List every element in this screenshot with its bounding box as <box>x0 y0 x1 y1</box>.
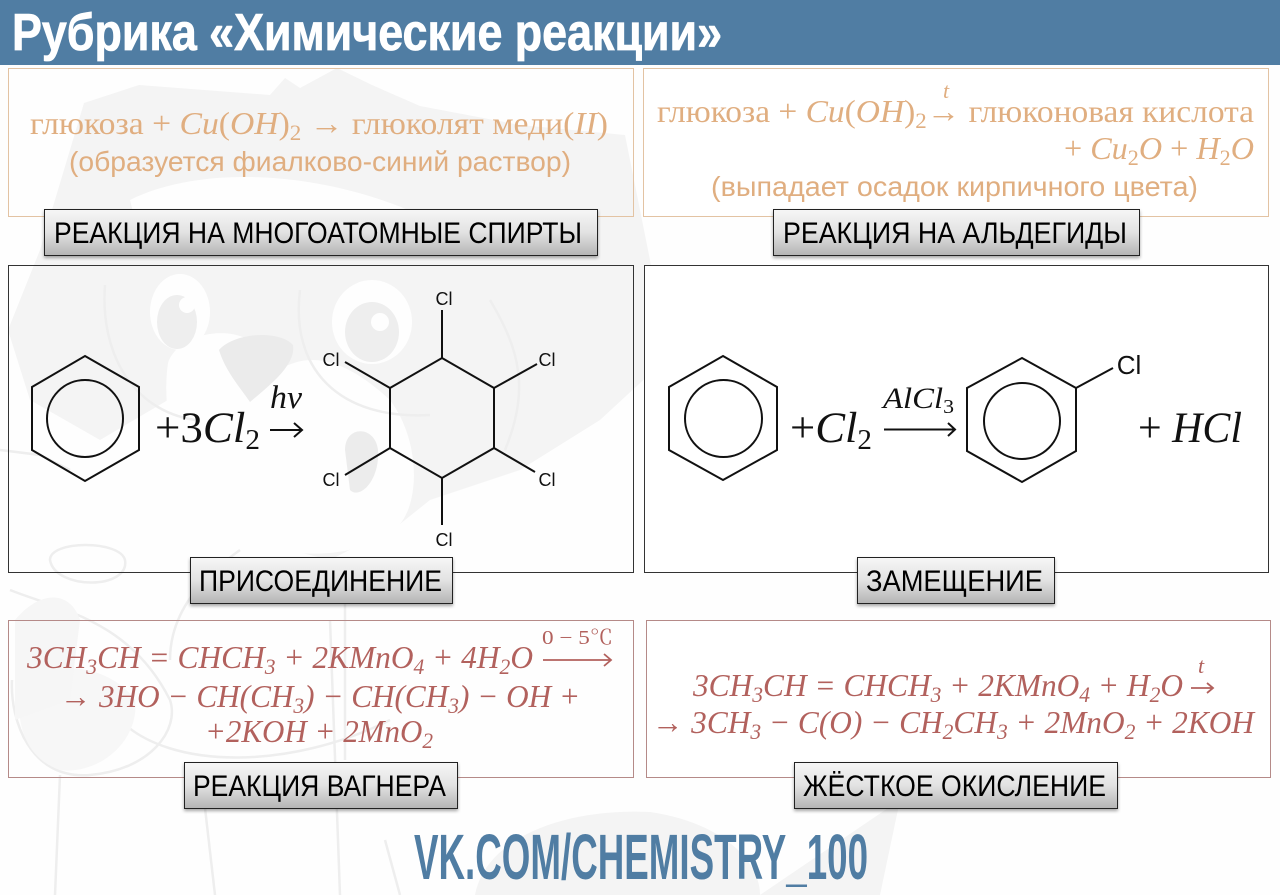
condition: t: t <box>1198 653 1205 678</box>
panel: reaction on polyhydric alcohols <box>8 68 634 216</box>
equation line 2: 2 <box>943 719 953 744</box>
chlorobenzene <box>967 350 1141 482</box>
label: addition: ПРИСОЕДИНЕНИЕ <box>199 565 442 598</box>
equation line 1: 2 <box>500 654 510 679</box>
equation line 2: → 3HO − CH(CH <box>60 678 299 714</box>
benzene ring <box>32 356 139 481</box>
equation line 1: 3 <box>930 682 941 707</box>
equation line 1: 3 <box>751 682 763 707</box>
equation line 1: 3CH <box>693 667 753 703</box>
equation line 2: → 3CH <box>652 704 752 740</box>
label: reaction on polyhydric alcohols: РЕАКЦИЯ НА МНОГОАТОМНЫЕ СПИРТЫ <box>54 217 582 250</box>
reagent: Cl2: 2 <box>857 425 872 456</box>
equation line 1: + H <box>1090 667 1151 703</box>
reagent: 3Cl2: +3Cl <box>155 405 244 452</box>
equation line 2: 2 <box>1125 719 1135 744</box>
equation: glucose oxidation: 2 <box>915 108 927 133</box>
equation line 1: O <box>1160 667 1183 703</box>
equation line 2: 3 <box>447 693 459 718</box>
equation line 1: CH = CHCH <box>763 667 932 703</box>
equation: glucose with copper hydroxide: 2 <box>290 120 301 145</box>
catalyst: AlCl3: 3 <box>943 396 954 418</box>
hexachlorocyclohexane: Cl <box>322 470 340 490</box>
footer link: VK.COM/CHEMISTRY_100 <box>414 821 868 893</box>
equation line 1: 3 <box>264 654 276 679</box>
equation line 2: 3 <box>292 693 304 718</box>
panel: harsh oxidation <box>646 620 1270 778</box>
reagent: 3Cl2: 2 <box>245 425 260 456</box>
equation: glucose with copper hydroxide: II) <box>574 105 607 141</box>
note: violet-blue solution: (образуется фиалково-синий раствор) <box>69 146 571 177</box>
equation line 2: + 2KOH <box>1135 704 1256 740</box>
equation: products: + Cu <box>1064 130 1128 166</box>
equation line 1: 3CH <box>27 639 87 675</box>
label: substitution <box>858 558 1054 604</box>
hexachlorocyclohexane: Cl <box>322 350 340 370</box>
equation: products: O <box>1231 130 1254 166</box>
chlorobenzene: Cl <box>1117 350 1141 380</box>
condition: hv: hν <box>270 380 302 416</box>
arrow <box>1191 683 1213 693</box>
label: substitution: ЗАМЕЩЕНИЕ <box>866 565 1043 598</box>
label: reaction on aldehydes <box>774 210 1140 256</box>
catalyst: AlCl3: AlCl <box>881 382 943 415</box>
label: reaction on polyhydric alcohols <box>44 210 598 256</box>
panel: reaction on aldehydes <box>644 68 1268 216</box>
label: Wagner reaction: РЕАКЦИЯ ВАГНЕРА <box>193 770 446 803</box>
equation line 2: 3 <box>996 719 1008 744</box>
equation: products: O <box>1139 130 1162 166</box>
equation line 1: O <box>510 639 533 675</box>
equation line 1: + 4H <box>424 639 501 675</box>
label: harsh oxidation <box>794 762 1118 808</box>
header bar <box>0 0 1280 65</box>
label: reaction on aldehydes: РЕАКЦИЯ НА АЛЬДЕГИДЫ <box>783 217 1127 250</box>
panel: substitution <box>644 266 1268 572</box>
equation: products: 2 <box>1128 145 1139 170</box>
panel: addition <box>8 266 634 572</box>
hexachlorocyclohexane: Cl <box>538 350 556 370</box>
arrow <box>270 423 302 437</box>
equation: glucose with copper hydroxide: глюкоза + Cu(OH) <box>30 105 289 141</box>
equation line 1: 4 <box>1079 682 1090 707</box>
equation line 1: + 2KMnO <box>276 639 414 675</box>
label: harsh oxidation: ЖЁСТКОЕ ОКИСЛЕНИЕ <box>803 770 1106 803</box>
arrow <box>543 654 611 666</box>
arrow <box>884 423 955 436</box>
label: Wagner reaction <box>184 762 458 808</box>
title: Рубрика «Химические реакции» <box>12 4 722 62</box>
hexachlorocyclohexane: Cl <box>538 470 556 490</box>
equation line 2: − C(O) − CH <box>761 704 945 740</box>
equation line 1: 2 <box>1150 682 1160 707</box>
hexachlorocyclohexane: Cl <box>436 289 452 309</box>
equation line 2: 3 <box>749 719 761 744</box>
panel: Wagner reaction <box>8 620 634 778</box>
equation line 3: 2 <box>422 728 433 753</box>
product: HCl: + HCl <box>1138 405 1242 452</box>
equation line 2: + 2MnO <box>1008 704 1125 740</box>
equation line 1: 3 <box>85 654 97 679</box>
equation: glucose with copper hydroxide: → глюколят меди( <box>301 105 574 141</box>
equation line 1: 4 <box>414 654 424 679</box>
equation: products: + H <box>1170 130 1220 166</box>
equation: glucose oxidation: глюкоза + Cu(OH) <box>657 93 915 129</box>
background watermark: fox mascot <box>0 68 900 895</box>
equation line 1: + 2KMnO <box>941 667 1079 703</box>
equation: products: 2 <box>1220 145 1231 170</box>
benzene ring <box>669 356 777 480</box>
equation line 1: CH = CHCH <box>97 639 267 675</box>
hexachlorocyclohexane <box>322 289 556 550</box>
equation line 2: ) − OH + <box>457 678 580 714</box>
reagent: Cl2: +Cl <box>790 405 856 452</box>
equation line 2: ) − CH(CH <box>302 678 450 714</box>
note: brick-red precipitate: (выпадает осадок кирпичного цвета) <box>711 171 1198 202</box>
label: addition <box>190 558 452 604</box>
condition: t: t <box>943 78 950 103</box>
hexachlorocyclohexane: Cl <box>436 530 452 550</box>
equation line 3: +2KOH + 2MnO <box>205 713 430 749</box>
equation line 2: CH <box>953 704 999 740</box>
equation: glucose oxidation: → глюконовая кислота <box>927 93 1254 129</box>
condition: 0-5 C: 0 − 5℃ <box>542 627 613 649</box>
